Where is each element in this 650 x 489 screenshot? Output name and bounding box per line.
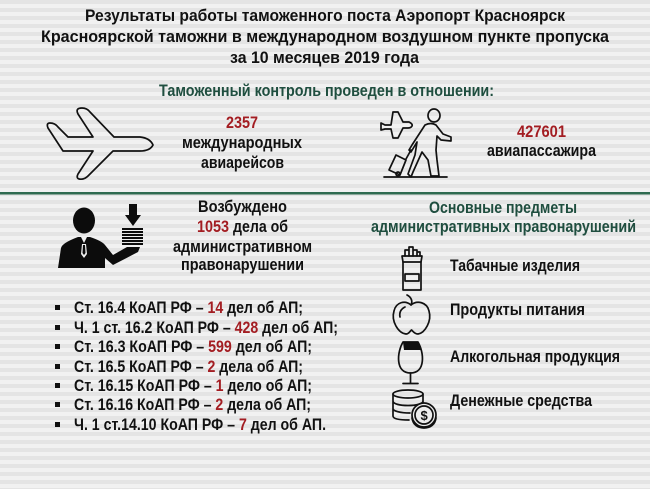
list: violations bbox=[55, 299, 338, 434]
icon: passenger with plane and suitcase bbox=[381, 109, 451, 177]
heading: main subjects: Основные предметы bbox=[429, 199, 577, 217]
icon: official with documents bbox=[58, 204, 143, 268]
text: cases opened: Возбуждено bbox=[198, 198, 287, 216]
icon: dollar sign: $ bbox=[420, 408, 428, 423]
list: violations: Ст. 16.4 КоАП РФ – 14 дел об АП; bbox=[74, 299, 303, 317]
text: flights count: 2357 bbox=[226, 114, 258, 132]
list: violations: Ст. 16.3 КоАП РФ – 599 дел об АП; bbox=[74, 338, 312, 356]
list: violations: Ч. 1 ст. 16.2 КоАП РФ – 428 дел об АП; bbox=[74, 319, 338, 337]
text: cases opened: 1053 bbox=[197, 218, 229, 236]
label: money: Денежные средства bbox=[450, 392, 593, 410]
text: flights count bbox=[182, 114, 302, 172]
heading: main subjects bbox=[371, 199, 636, 236]
divider bbox=[0, 192, 650, 194]
text: cases opened: дела об bbox=[233, 218, 288, 236]
text: cases opened: административном bbox=[173, 238, 312, 256]
icon: airplane bbox=[47, 108, 153, 179]
icon: cigarettes bbox=[402, 247, 422, 290]
text: cases opened: правонарушении bbox=[181, 256, 304, 274]
text: passengers count: 427601 bbox=[517, 123, 566, 141]
list: violations: Ст. 16.15 КоАП РФ – 1 дело об АП; bbox=[74, 377, 312, 395]
title: Красноярской таможни в международном воздушном пункте пропуска bbox=[41, 28, 610, 46]
icon: wine glass bbox=[399, 342, 422, 384]
icon: money stack and coin bbox=[393, 390, 436, 428]
title: за 10 месяцев 2019 года bbox=[230, 49, 420, 67]
text: flights count: международных bbox=[182, 134, 302, 152]
text: passengers count: авиапассажира bbox=[487, 142, 597, 160]
text: passengers count bbox=[487, 123, 597, 160]
list: violations: Ст. 16.5 КоАП РФ – 2 дела об АП; bbox=[74, 358, 303, 376]
title bbox=[41, 7, 610, 67]
label: food: Продукты питания bbox=[450, 301, 585, 319]
label: tobacco: Табачные изделия bbox=[450, 257, 580, 275]
heading: customs control: Таможенный контроль проведен в отношении: bbox=[159, 82, 494, 100]
title: Результаты работы таможенного поста Аэропорт Красноярск bbox=[85, 7, 566, 25]
list: violations: Ст. 16.16 КоАП РФ – 2 дела об АП; bbox=[74, 396, 311, 414]
text: flights count: авиарейсов bbox=[201, 154, 284, 172]
text: cases opened bbox=[173, 198, 312, 274]
icon: apple bbox=[393, 295, 430, 334]
list: violations: Ч. 1 ст.14.10 КоАП РФ – 7 дел об АП. bbox=[74, 416, 326, 434]
label: alcohol: Алкогольная продукция bbox=[450, 348, 620, 366]
